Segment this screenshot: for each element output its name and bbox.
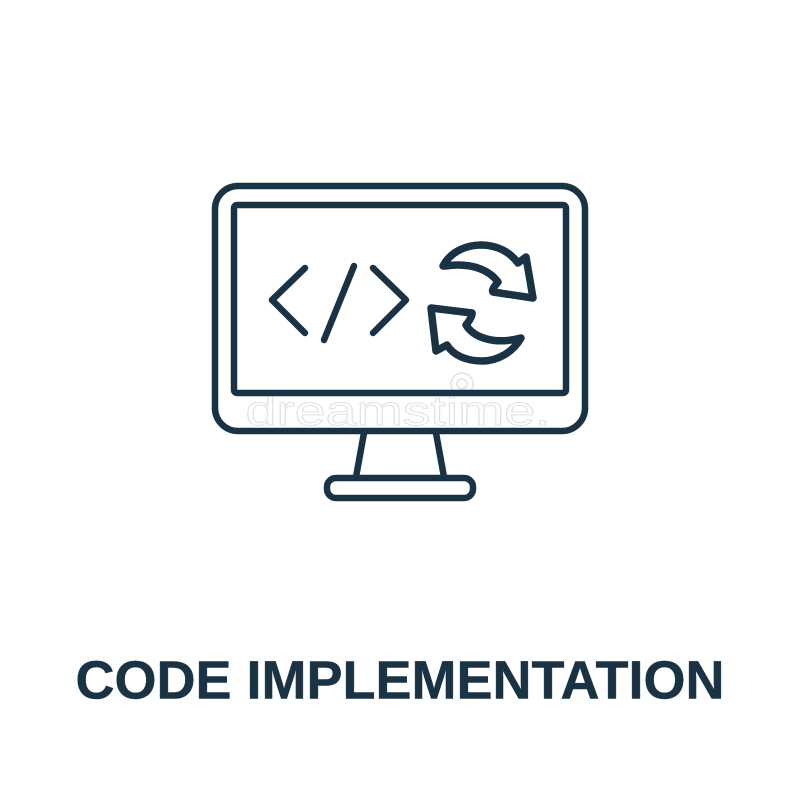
icon: computer monitor with code [215,186,585,498]
icon: left angle bracket [272,268,305,333]
icon: upper refresh arrow [443,245,533,298]
monitor base [327,478,473,498]
watermark text: dreamstime. [246,387,550,434]
icon: right angle bracket [373,268,406,333]
watermark [246,373,550,434]
watermark logo [451,373,473,395]
title: CODE IMPLEMENTATION [76,650,724,710]
monitor outer frame [215,186,585,431]
icon: slash [324,266,354,340]
monitor stand [356,433,444,477]
icon: lower refresh arrow [431,308,521,361]
monitor screen [234,205,566,393]
